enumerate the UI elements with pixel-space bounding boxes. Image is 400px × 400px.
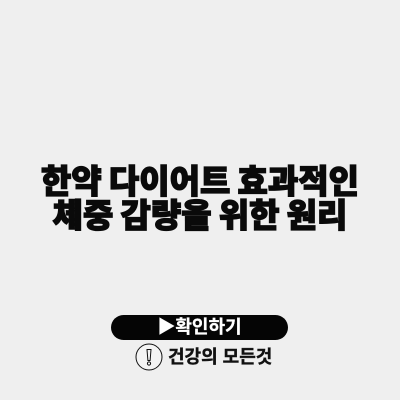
icon: exclamation circle <box>136 344 162 370</box>
button: confirm: ▶확인하기 <box>157 317 242 337</box>
title <box>41 163 359 234</box>
title: 체중 감량을 위한 원리 <box>53 197 347 234</box>
caption: 건강의 모든것 <box>168 347 272 367</box>
button: confirm <box>111 315 288 340</box>
title: 한약 다이어트 효과적인 <box>41 163 359 200</box>
